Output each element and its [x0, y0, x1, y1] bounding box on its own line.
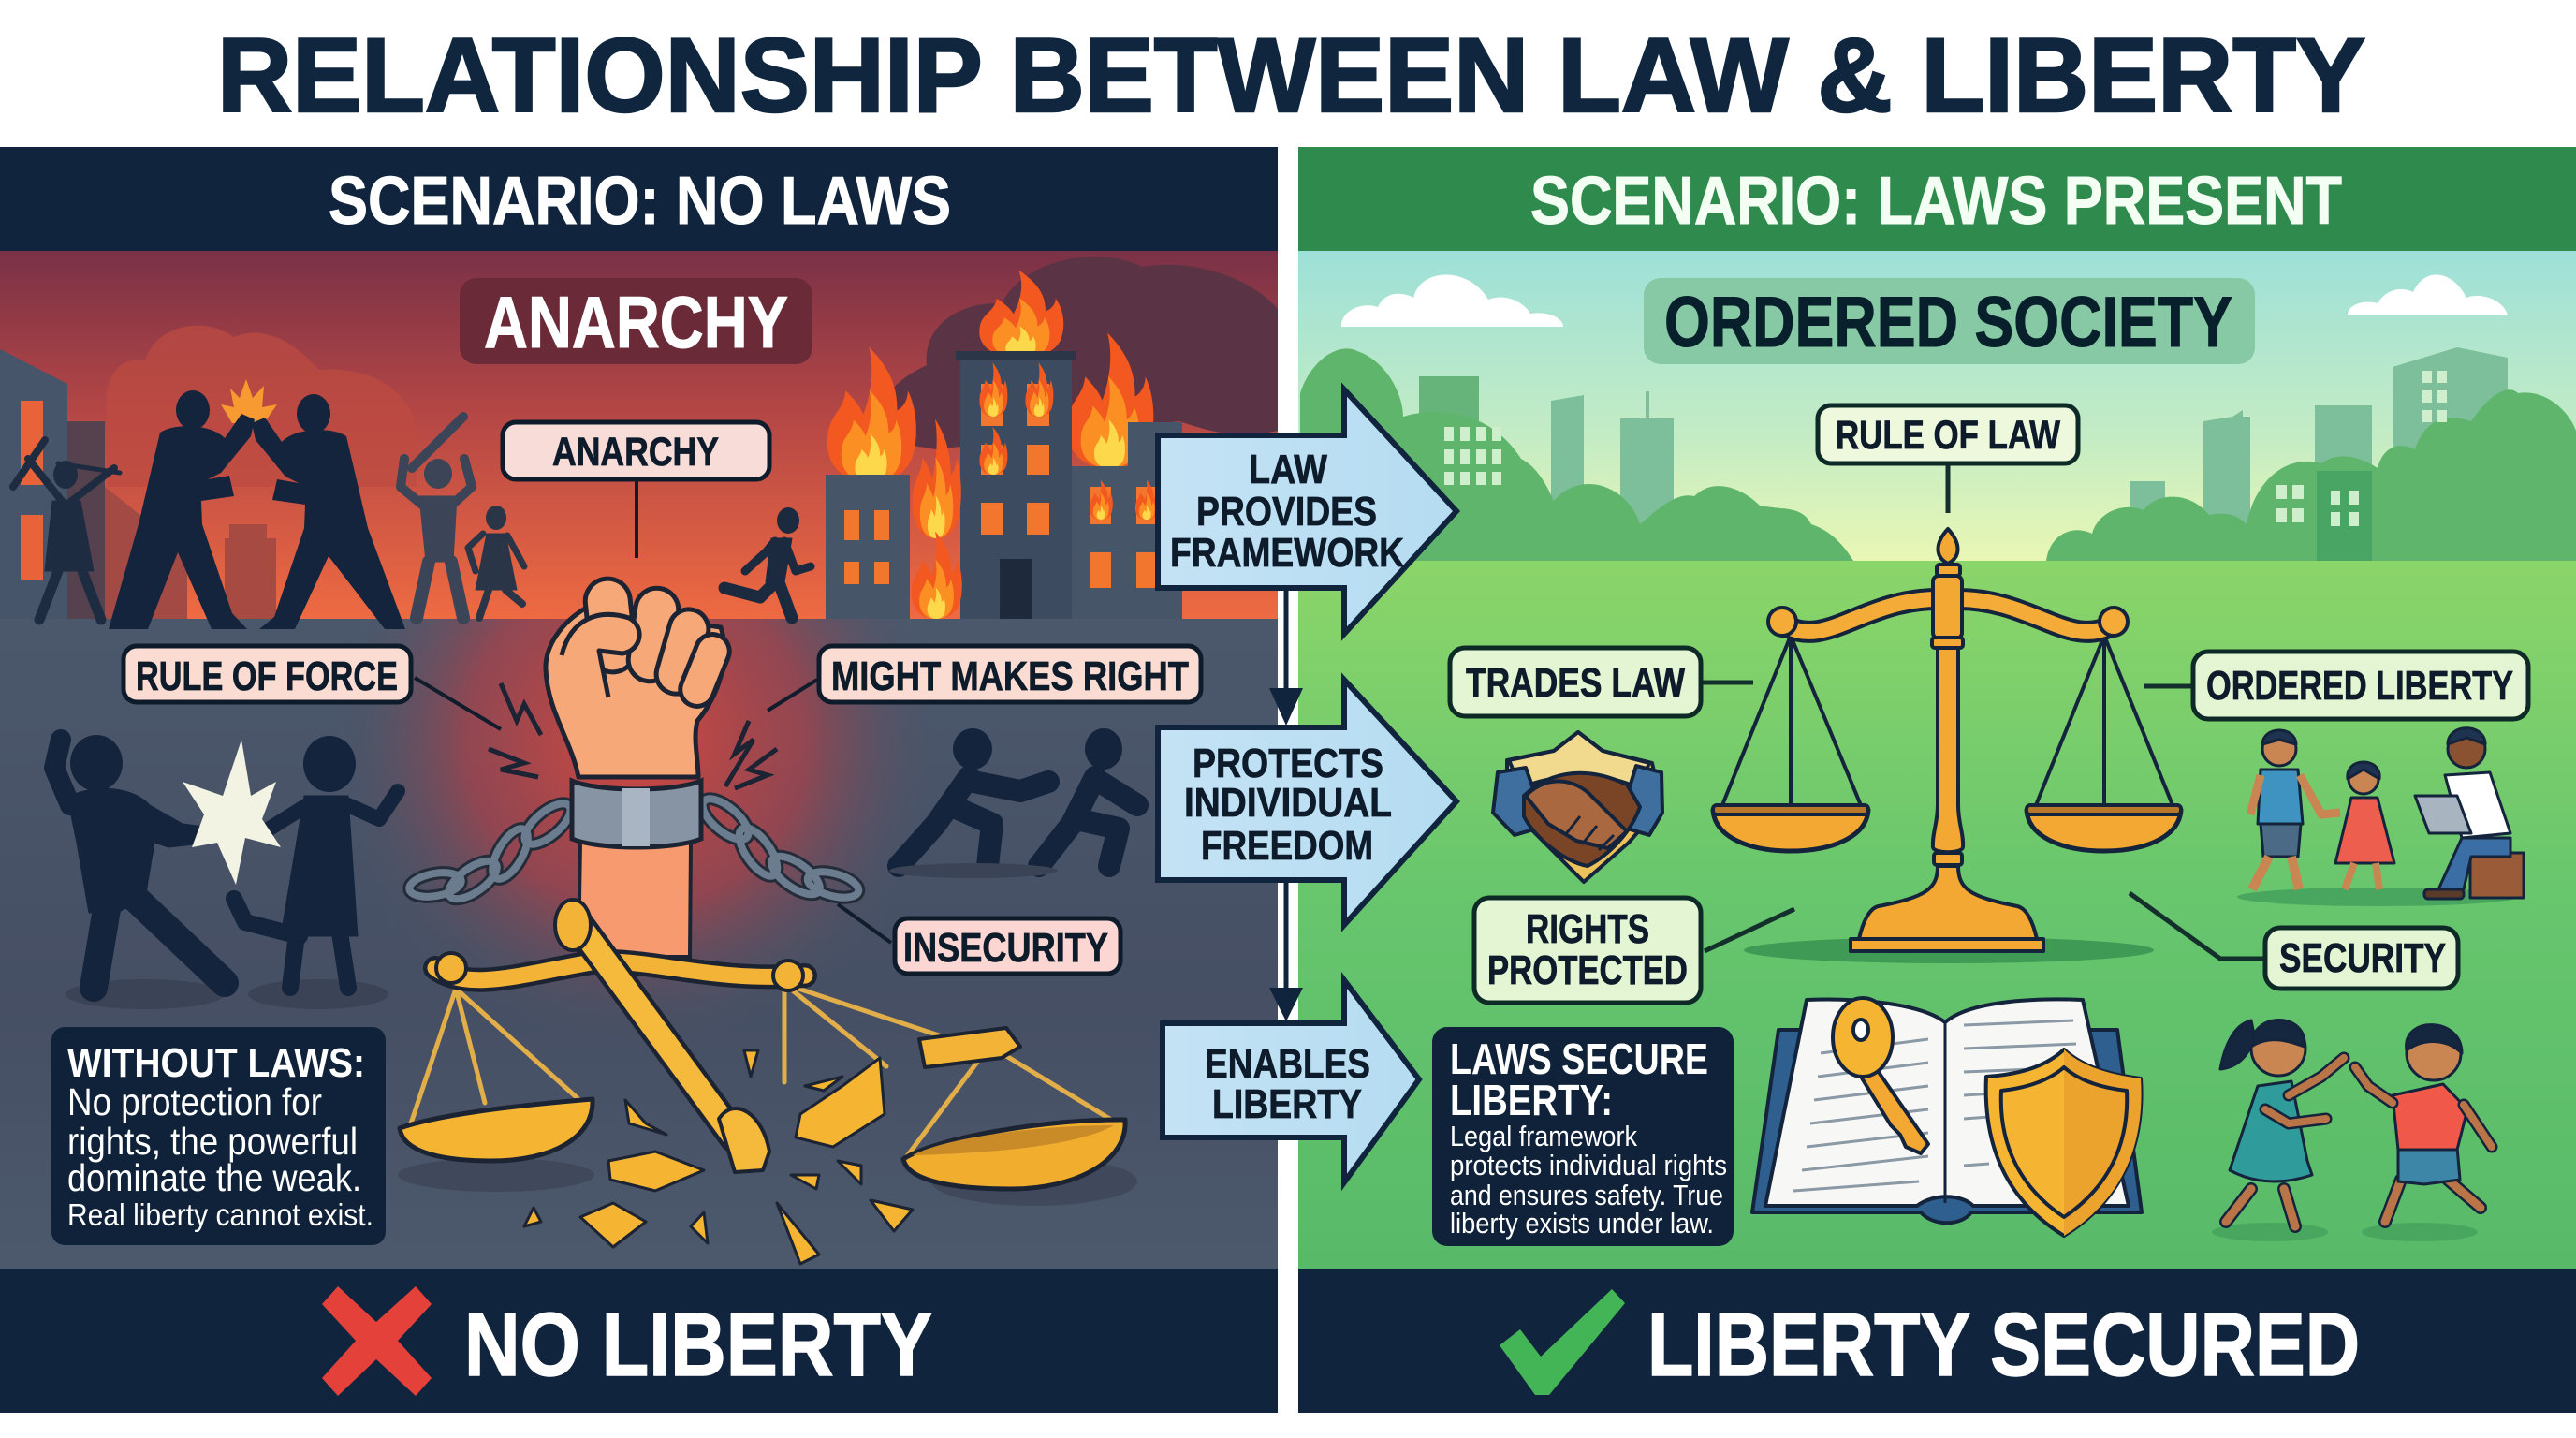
- key: [1861, 1065, 1928, 1153]
- arrow: enables liberty: [1163, 980, 1419, 1182]
- spark between fighters: [221, 379, 277, 423]
- dark smoke above buildings: [878, 257, 1278, 449]
- arrow: protects individual freedom: [1158, 680, 1456, 925]
- figure: runner: [724, 507, 811, 618]
- text block: laws secure liberty: LAWS SECURE: [1450, 1034, 1708, 1083]
- text block: laws secure liberty: liberty exists under law.: [1450, 1207, 1714, 1240]
- left pan: [400, 1099, 593, 1161]
- text block: laws secure liberty: LIBERTY:: [1450, 1076, 1613, 1124]
- girl: [2226, 1189, 2295, 1226]
- shards: [524, 1050, 913, 1264]
- icon: family with laptop: [2237, 728, 2524, 906]
- figure: man with weapon: [401, 417, 472, 618]
- ground: dark grey: [0, 619, 1278, 1269]
- leader lines left: [415, 481, 891, 943]
- leader lines right: [1703, 463, 2265, 959]
- red glow behind fist: [318, 619, 955, 1059]
- label: security: [2265, 928, 2458, 989]
- arrow: law provides framework: FRAMEWORK: [1170, 530, 1404, 576]
- label: insecurity: INSECURITY: [903, 925, 1108, 971]
- figure: left fighter: [109, 390, 255, 629]
- dark green buildings with windows: [1444, 371, 2447, 561]
- beam: [1783, 599, 1938, 632]
- label: ordered liberty: [2193, 652, 2528, 719]
- boy: [2262, 732, 2296, 766]
- impact marks: [489, 683, 777, 788]
- left pan shadow: [398, 1158, 594, 1192]
- icon: handshake with gold star: [1493, 732, 1662, 882]
- girl: [2349, 764, 2378, 794]
- boy: [2385, 1180, 2481, 1222]
- smoke cloud behind fighters: [106, 326, 417, 487]
- label: rule of force: RULE OF FORCE: [136, 653, 398, 699]
- broken gold scales: [398, 900, 1137, 1264]
- text block: without laws: No protection for: [67, 1080, 322, 1123]
- scenario header: no laws: [0, 147, 1278, 251]
- burning buildings: [826, 270, 1182, 619]
- right pan: [903, 1120, 1125, 1189]
- ground: green field: [1298, 561, 2576, 1269]
- scale beam: [435, 961, 805, 980]
- figures: two people running: [889, 728, 1137, 878]
- verdict bar: liberty secured: LIBERTY SECURED: [1647, 1295, 2360, 1395]
- scenario header: laws present: [1298, 147, 2576, 251]
- label: rule of force: [124, 646, 411, 702]
- ruined buildings left: [0, 349, 276, 619]
- text block: without laws: [51, 1027, 386, 1245]
- flames behind buildings: [827, 346, 916, 482]
- panel: laws present scenario: [1298, 147, 2576, 1413]
- strings and pans: [1720, 636, 2174, 810]
- label: anarchy: ANARCHY: [552, 430, 719, 475]
- chains: [407, 792, 861, 906]
- panel: no laws scenario: [0, 147, 1278, 1413]
- pillar: [1938, 529, 1958, 564]
- arrow: law provides framework: [1158, 389, 1456, 634]
- figure: right fighter: [252, 394, 405, 629]
- text block: without laws: rights, the powerful: [67, 1120, 358, 1163]
- arrow: enables liberty: ENABLES: [1205, 1041, 1370, 1087]
- text block: laws secure liberty: [1432, 1027, 1734, 1246]
- label: security: SECURITY: [2279, 935, 2446, 981]
- sky: clear teal: [1298, 251, 2576, 561]
- arrow: enables liberty: LIBERTY: [1212, 1081, 1362, 1127]
- label: rights protected: [1474, 898, 1701, 1003]
- raised fist: [546, 577, 735, 777]
- windows: [844, 384, 1157, 588]
- forearm: [578, 843, 691, 957]
- tree line: [1300, 348, 2576, 561]
- man on crate: [2470, 853, 2524, 898]
- heading badge: anarchy: ANARCHY: [484, 281, 788, 363]
- connector arrows down the centre: [1269, 588, 1303, 1021]
- text block: without laws: WITHOUT LAWS:: [67, 1040, 365, 1086]
- text block: laws secure liberty: and ensures safety. True: [1450, 1179, 1723, 1211]
- heading badge: ordered society: ORDERED SOCIETY: [1664, 283, 2232, 362]
- golden scales of justice: [1713, 529, 2181, 963]
- right pan shadow: [931, 1157, 1137, 1206]
- arrow: law provides framework: PROVIDES: [1196, 489, 1377, 535]
- text block: laws secure liberty: protects individual rights: [1450, 1149, 1727, 1181]
- arrow: protects individual freedom: INDIVIDUAL: [1184, 780, 1392, 826]
- icon: red cross: [322, 1286, 432, 1396]
- label: trades law: TRADES LAW: [1466, 660, 1685, 706]
- figure: child fleeing: [468, 506, 524, 618]
- wrist cuff: [572, 781, 701, 847]
- label: rule of law: [1818, 405, 2078, 463]
- label: rights protected: PROTECTED: [1487, 947, 1688, 993]
- scenario header: laws present: SCENARIO: LAWS PRESENT: [1530, 164, 2342, 239]
- snapped column: [577, 922, 735, 1137]
- broken beam piece: [919, 1028, 1020, 1067]
- scale strings: [411, 984, 1120, 1156]
- scenario header: no laws: SCENARIO: NO LAWS: [329, 164, 951, 239]
- figures: two children playing: [2212, 1020, 2492, 1241]
- arrow: law provides framework: LAW: [1249, 447, 1327, 492]
- label: anarchy: [503, 422, 769, 479]
- shield: [1986, 1049, 2142, 1236]
- figures: fighting man and woman with impact burst: [54, 735, 398, 1009]
- title: RELATIONSHIP BETWEEN LAW & LIBERTY: [217, 17, 2365, 134]
- figure: background woman with raised arms: [13, 412, 120, 620]
- icon: open law book with key: [1752, 998, 2142, 1236]
- label: might makes right: [819, 646, 1201, 702]
- sky: burning red: [0, 251, 1278, 619]
- label: might makes right: MIGHT MAKES RIGHT: [831, 653, 1189, 699]
- label: trades law: [1450, 648, 1701, 716]
- verdict bar: liberty secured: [1298, 1269, 2576, 1413]
- label: rule of law: RULE OF LAW: [1836, 413, 2060, 458]
- distant buildings: [1419, 347, 2508, 561]
- flames between and inside: [913, 419, 961, 538]
- clouds: [1341, 274, 2508, 327]
- text block: without laws: dominate the weak.: [67, 1156, 361, 1199]
- label: rights protected: RIGHTS: [1526, 906, 1649, 952]
- verdict bar: no liberty: [0, 1269, 1278, 1413]
- text block: without laws: Real liberty cannot exist.: [67, 1197, 373, 1232]
- arrow: protects individual freedom: PROTECTS: [1193, 741, 1383, 786]
- verdict bar: no liberty: NO LIBERTY: [464, 1295, 932, 1395]
- icon: green check: [1500, 1289, 1625, 1395]
- arrow: protects individual freedom: FREEDOM: [1201, 823, 1373, 869]
- text block: laws secure liberty: Legal framework: [1450, 1120, 1637, 1152]
